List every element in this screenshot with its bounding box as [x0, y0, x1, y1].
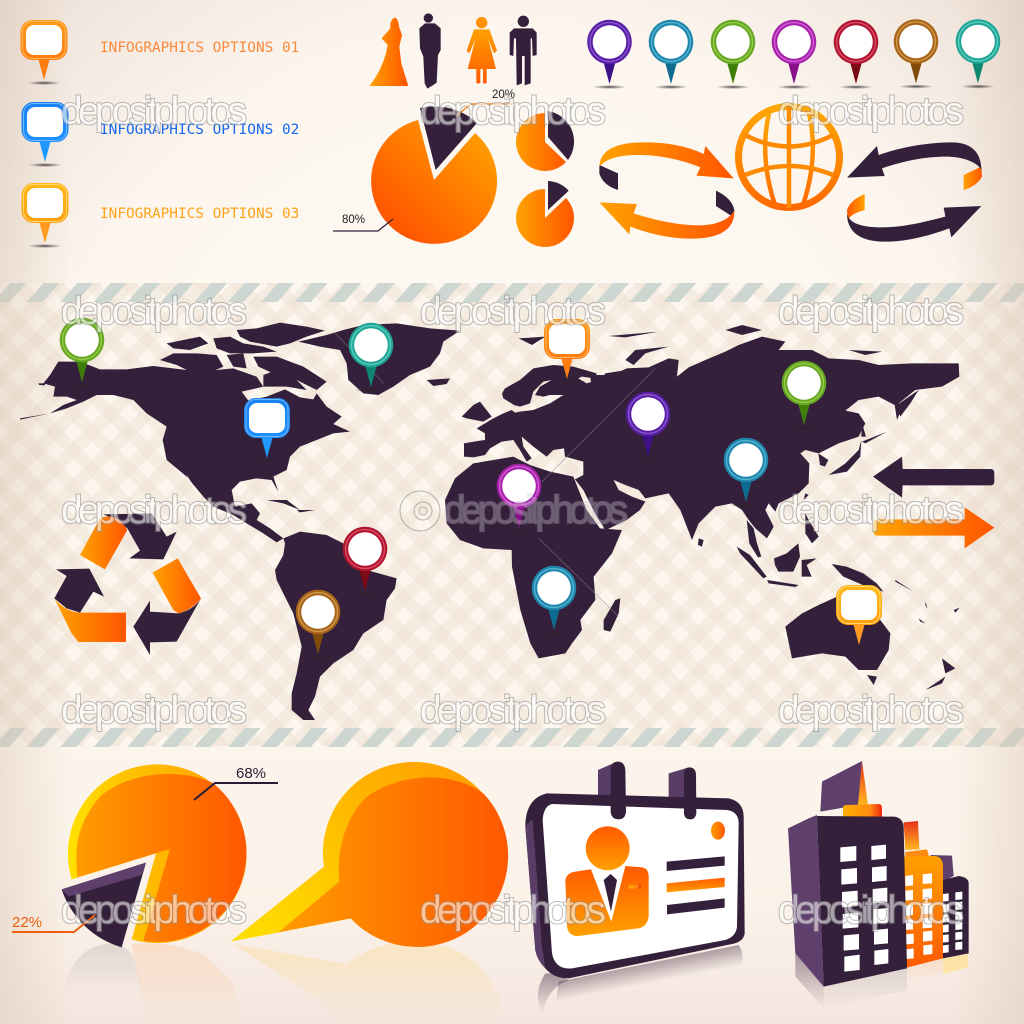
- pin: teal Greenland: [349, 323, 393, 392]
- text: option 01: INFOGRAPHICS OPTIONS 01: [100, 40, 299, 56]
- pie: orange front layer: [76, 774, 246, 942]
- recycle: top arrow: [103, 513, 177, 559]
- pin: purple Russia: [626, 392, 670, 461]
- pie slice: 22 percent: [62, 863, 146, 947]
- watermark row 1: [61, 90, 964, 133]
- pin: green Siberia: [782, 361, 826, 430]
- watermarks: [61, 90, 964, 932]
- watermark row 5: depositphotos: [778, 889, 964, 932]
- speech bubble: [231, 762, 508, 947]
- building reflections: [795, 953, 968, 1008]
- watermark row 3: depositphotos: [61, 489, 247, 532]
- pin: blue option 02: [22, 102, 68, 167]
- watermark row 2: depositphotos: [61, 290, 247, 333]
- leader line 80%: [333, 219, 393, 231]
- panel: lower background: [0, 746, 1024, 1024]
- arrow: bottom loop: [716, 191, 734, 217]
- pie slice: 20 percent: [420, 106, 477, 170]
- pin: yellow Australia: [836, 585, 882, 650]
- icon: left arrow: [873, 457, 994, 498]
- watermark row 2: depositphotos: [420, 290, 606, 333]
- watermark row 1: depositphotos: [420, 90, 606, 133]
- label: 68%: 68%: [236, 765, 266, 782]
- person icon badge pin: [629, 885, 641, 889]
- badge clips front: [611, 762, 626, 819]
- chart: small pie two: [516, 181, 574, 247]
- pin: red South America: [343, 527, 387, 596]
- pin: blue: [649, 20, 693, 89]
- watermark row 5: depositphotos: [61, 889, 247, 932]
- watermark row 4: depositphotos: [420, 689, 606, 732]
- pin: brown: [894, 19, 938, 89]
- arrow: bottom loop: [847, 194, 865, 220]
- icon: woman symbol: [467, 17, 497, 83]
- badge dot: [711, 822, 725, 840]
- person icon body: [565, 866, 649, 936]
- watermark row 5: [61, 889, 964, 932]
- badge clips back: [598, 762, 625, 803]
- tall tower spire: [820, 761, 862, 812]
- main tower side: [788, 815, 824, 987]
- panel: options list: [20, 20, 299, 248]
- icon: man symbol: [510, 16, 537, 85]
- map: Asia, Africa and Australia: [445, 325, 960, 690]
- watermark row 2: [61, 290, 964, 333]
- watermark row 4: depositphotos: [61, 689, 247, 732]
- pie slice: 80 percent: [371, 120, 497, 244]
- label: 20%: 20%: [492, 89, 515, 101]
- small dark building: [943, 876, 969, 958]
- badge white face: [543, 804, 739, 968]
- watermark row 3: [61, 489, 964, 532]
- icon: woman in dress: [369, 17, 408, 86]
- label: 22%: 22%: [12, 914, 42, 931]
- pin: blue China: [724, 438, 768, 507]
- world map: [20, 323, 960, 720]
- icon: right arrow: [874, 507, 994, 548]
- leader line 68%: [194, 783, 278, 800]
- pin: orange Europe: [544, 319, 590, 384]
- pin row: coloured markers: [587, 19, 1000, 89]
- pin: purple: [587, 20, 632, 89]
- orange building: [904, 821, 919, 850]
- stripe band: top: [0, 283, 1024, 302]
- pin: yellow option 03: [22, 183, 68, 248]
- pie: yellow back layer: [68, 764, 247, 943]
- pin: red: [834, 20, 878, 89]
- map: Europe: [464, 365, 673, 483]
- watermark row 4: depositphotos: [778, 689, 964, 732]
- small back building: [930, 855, 954, 882]
- icon: city buildings: [788, 761, 969, 1008]
- pin: blue North America: [244, 398, 290, 463]
- pin: green: [711, 20, 755, 89]
- badge side highlight: [525, 820, 545, 968]
- text: option 03: INFOGRAPHICS OPTIONS 03: [100, 206, 299, 222]
- reflections under pie and bubble: [63, 942, 500, 1024]
- badge frame: [525, 793, 745, 978]
- pin: orange option 01: [20, 20, 68, 85]
- icon: man in suit: [419, 13, 441, 89]
- bubble front layer: [278, 777, 508, 947]
- orange building windows: [905, 873, 932, 959]
- pin: green Alaska: [60, 318, 104, 387]
- recycle: left arrow: [54, 569, 104, 613]
- icon: dark loop arrows: [847, 142, 982, 242]
- leader line 20%: [456, 104, 514, 116]
- chart: large pie 80/20: [333, 89, 515, 244]
- pin: teal: [956, 19, 1000, 89]
- watermark row 2: depositphotos: [778, 290, 964, 333]
- badge text lines: [667, 856, 725, 914]
- watermark row 1: depositphotos: [61, 90, 247, 133]
- chart: small pie one: [516, 111, 574, 171]
- label: 80%: 80%: [342, 214, 365, 226]
- pin: magenta North Africa: [497, 464, 541, 533]
- arrow: top loop: [599, 165, 618, 190]
- person icon shirt: [591, 866, 625, 922]
- small building windows: [943, 892, 962, 953]
- pin: magenta: [772, 20, 816, 89]
- watermark camera logo: [400, 491, 440, 531]
- main tower front: [817, 816, 907, 987]
- pie slice highlight: [62, 863, 146, 897]
- pin: blue southern Africa: [532, 566, 576, 635]
- panel: plaid map background: [0, 283, 1024, 746]
- icon: recycle symbol: [54, 513, 201, 655]
- map: Arctic islands and Greenland: [160, 323, 460, 395]
- scratches over the map: [335, 333, 655, 617]
- icon: ID badge: [525, 762, 745, 1013]
- recycle: right arrow: [133, 598, 201, 655]
- text: option 02: INFOGRAPHICS OPTIONS 02: [100, 122, 299, 138]
- chart: bottom pie 68/22: [62, 764, 247, 947]
- watermark row 1: depositphotos: [778, 90, 964, 133]
- watermark row 3: depositphotos: [778, 489, 964, 532]
- bubble back layer: [231, 762, 505, 944]
- map pins: [60, 318, 882, 659]
- icons: people silhouettes: [369, 13, 537, 89]
- watermark row 4: [61, 689, 964, 732]
- stripe band: bottom: [0, 728, 1024, 747]
- watermark row 3: depositphotos: [444, 489, 628, 532]
- badge reflection: [538, 945, 743, 1013]
- map: Americas and Greenland: [20, 362, 492, 720]
- pin: brown South America: [296, 590, 340, 659]
- icon: globe: [738, 106, 840, 208]
- watermark row 5: depositphotos: [420, 889, 606, 932]
- arrow: top loop: [964, 167, 982, 190]
- leader line 22%: [12, 915, 95, 932]
- icon: orange loop arrows: [599, 142, 734, 239]
- person icon tie: [604, 874, 617, 912]
- person icon head: [586, 826, 630, 870]
- main tower windows: [840, 845, 888, 972]
